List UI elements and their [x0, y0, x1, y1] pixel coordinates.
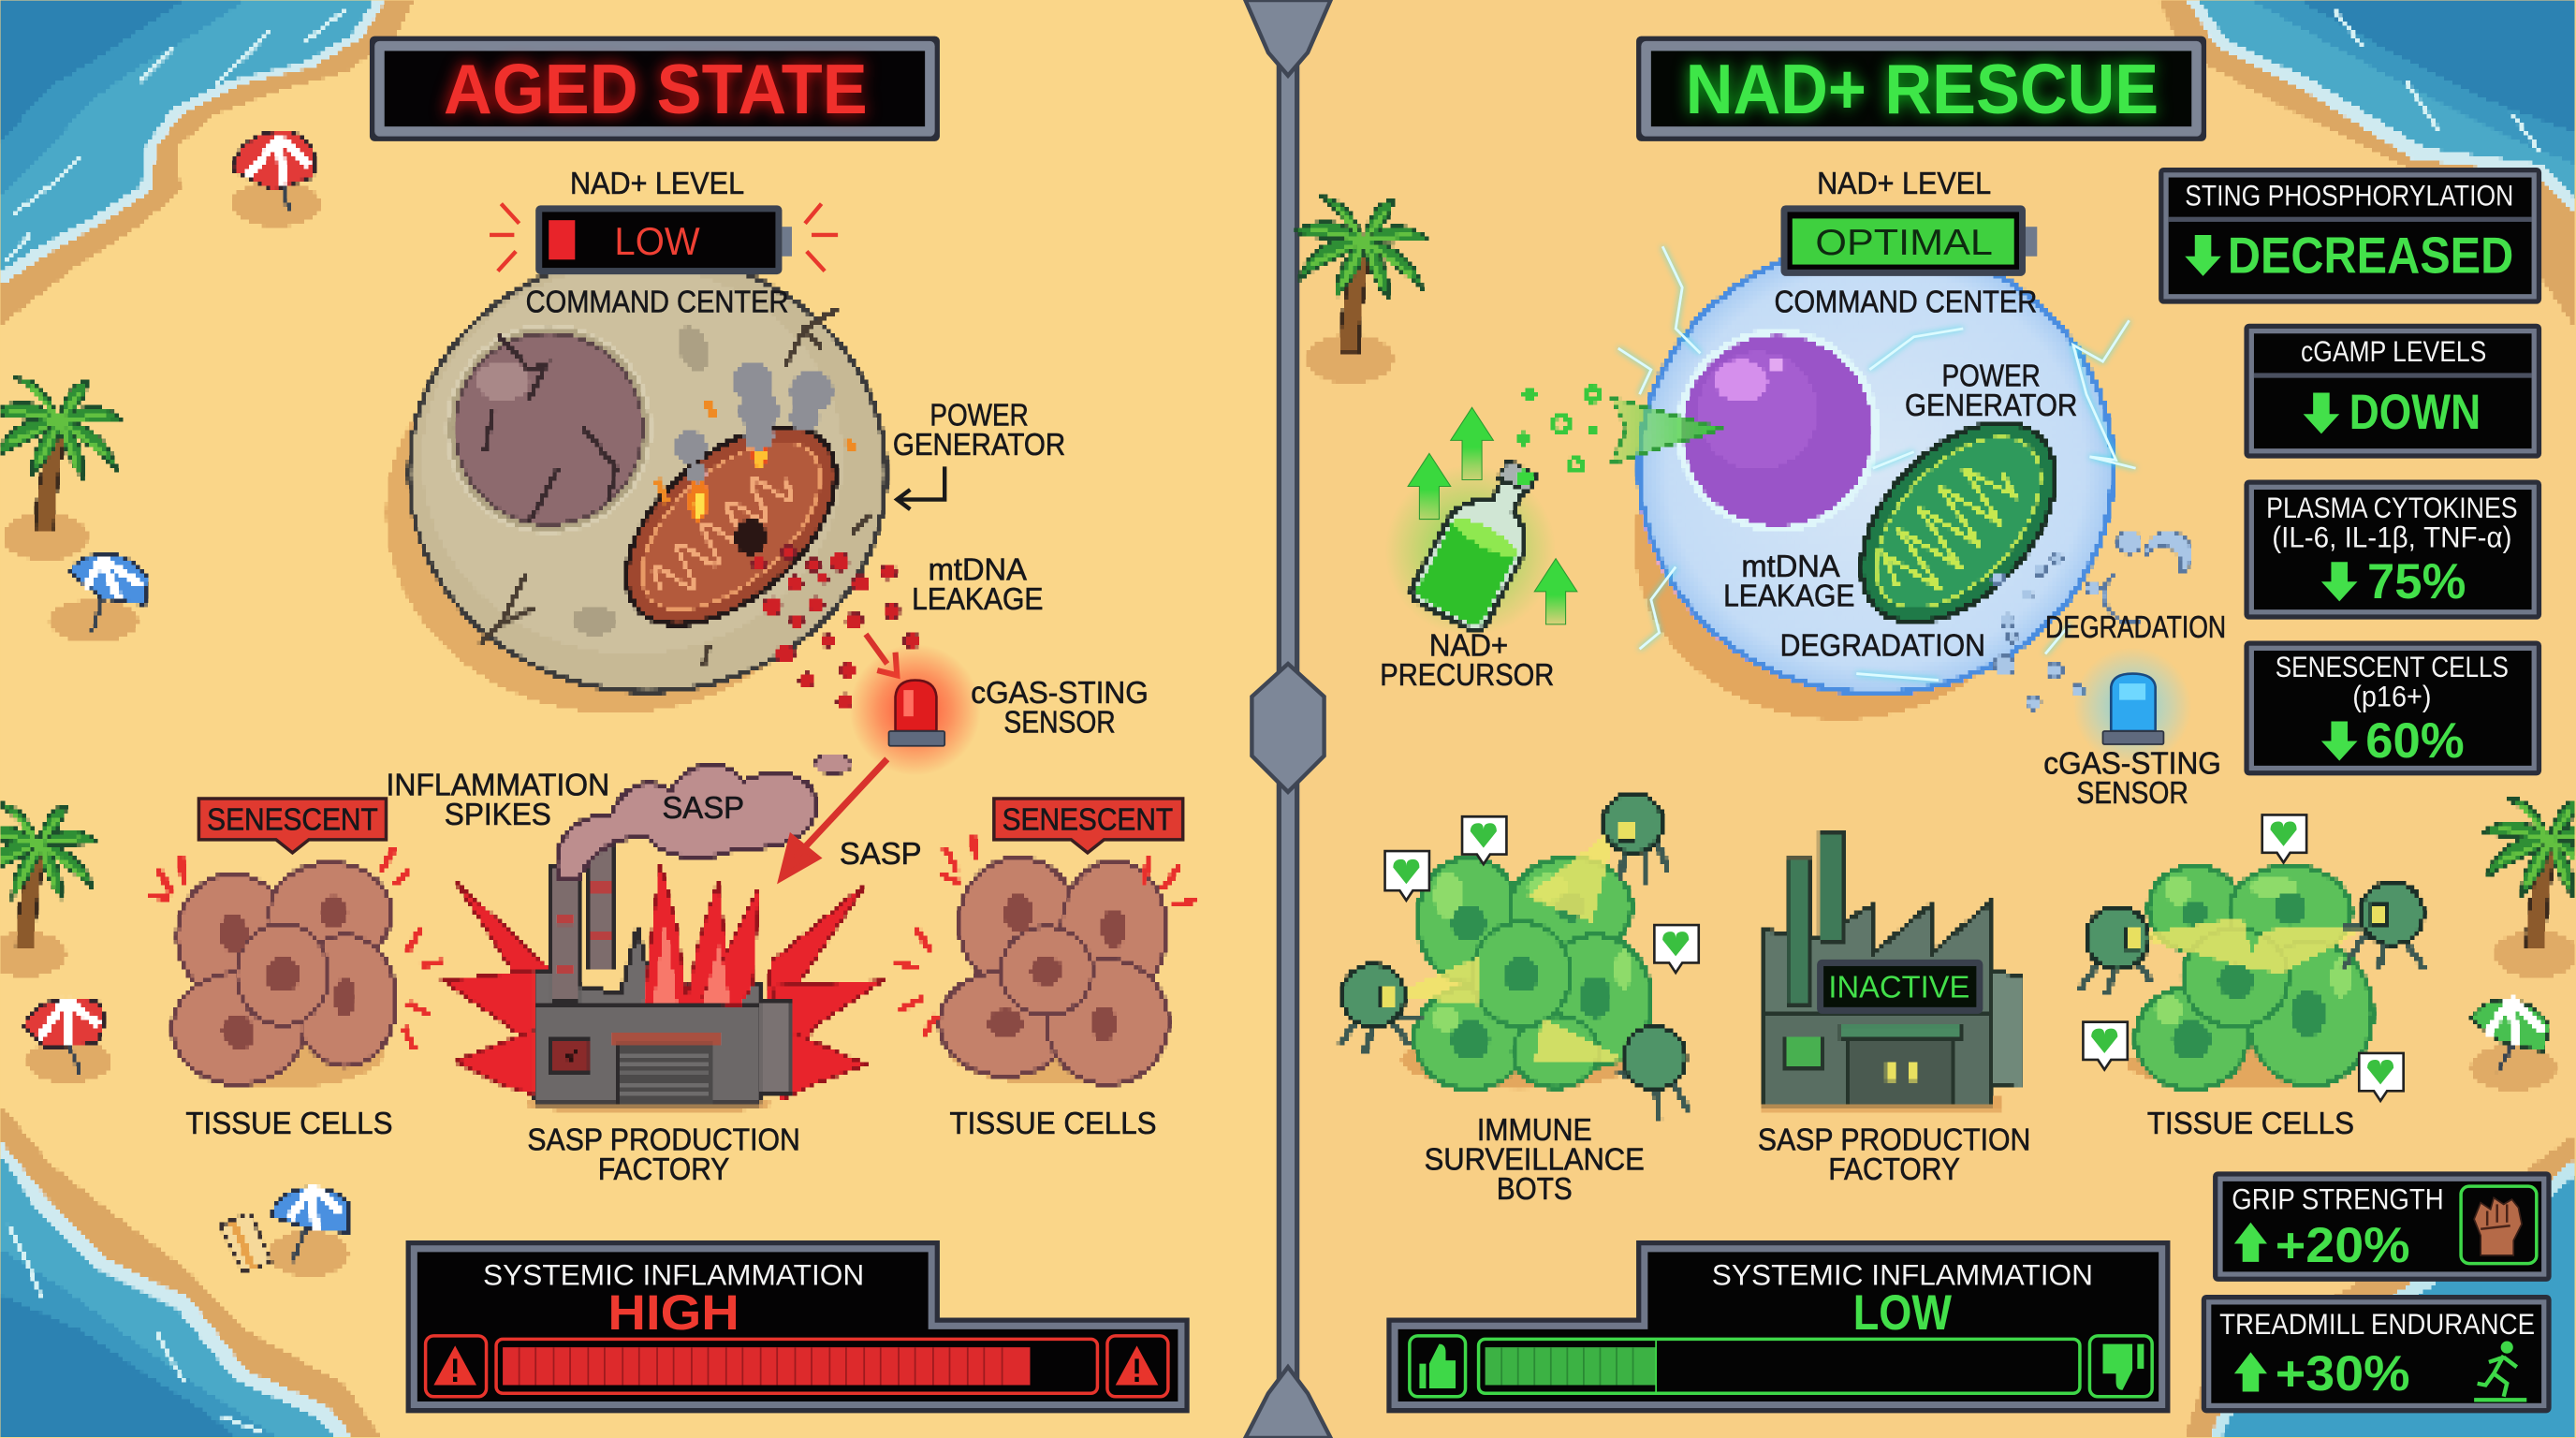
arrow: leakage to sensor: [866, 634, 897, 675]
up arrows: [1451, 407, 1493, 479]
label: immune surveillance bots: IMMUNE: [1477, 1113, 1592, 1148]
stat: cgamp levels: DOWN: [2349, 385, 2481, 440]
inflammation bar high: [496, 1339, 1097, 1393]
garage door: [611, 1032, 720, 1045]
label: cgas-sting sensor aged: SENSOR: [1003, 706, 1116, 741]
aged cell: [386, 255, 886, 713]
stat: treadmill endurance: [2202, 1295, 2552, 1413]
umbrella: blue left: [50, 554, 148, 642]
battery: low: LOW: [614, 219, 700, 263]
scanner beams: [1390, 827, 1625, 1064]
aged power generator: [591, 361, 871, 662]
label: sasp production factory right: SASP PRODUCTION: [1758, 1123, 2030, 1158]
label: immune surveillance bots: SURVEILLANCE: [1425, 1143, 1645, 1178]
stat: grip strength: GRIP STRENGTH: [2232, 1182, 2444, 1216]
label: sasp cloud: SASP: [662, 791, 744, 826]
palm tree: left lower: [0, 803, 98, 977]
palm tree: right lower: [2483, 798, 2576, 977]
label: tissue cells green: TISSUE CELLS: [2147, 1107, 2354, 1141]
immune bot top: [1603, 794, 1669, 884]
label: cgas-sting sensor aged: cGAS-STING: [971, 676, 1149, 711]
doors: [1840, 1025, 1962, 1038]
explosion spikes: [444, 881, 883, 1101]
label: power generator rescue: [1905, 359, 2077, 423]
label: mtdna leakage rescue: [1723, 550, 1854, 614]
label: mtdna leakage aged: mtDNA: [929, 553, 1028, 588]
label: inflammation spikes: SPIKES: [445, 798, 551, 832]
rescued nucleus: [1676, 329, 1880, 533]
label: cgas-sting sensor aged: [971, 676, 1149, 741]
icon: thumbs down: [2089, 1336, 2152, 1397]
systemic inflammation panel: high: SYSTEMIC INFLAMMATION: [483, 1257, 864, 1291]
label: power generator rescue: GENERATOR: [1905, 389, 2077, 423]
label: immune surveillance bots: BOTS: [1497, 1172, 1573, 1207]
warning sparks: [490, 204, 838, 271]
senescent factory: [444, 842, 883, 1114]
label: power generator aged: POWER: [929, 399, 1029, 433]
label: mtdna leakage rescue: mtDNA: [1741, 550, 1840, 584]
window: [550, 1038, 590, 1071]
icon: blue siren sensor: [2073, 647, 2191, 766]
arrow: precursor to nucleus: [1519, 388, 1721, 472]
icon: red siren sensor: [849, 644, 981, 775]
senescent tissue cells right: [896, 835, 1196, 1084]
label: degradation inside cell: DEGRADATION: [1780, 628, 1985, 663]
arrow: sensor to factory: [782, 759, 887, 877]
healthy tissue with bots left: [1340, 794, 1689, 1121]
smokestacks: [552, 868, 578, 1003]
stat: senescent cells: [2244, 640, 2541, 775]
icon: heart bubbles right: [2083, 814, 2404, 1101]
label: cgas-sting sensor rescue: SENSOR: [2076, 776, 2188, 811]
icon: nad+ precursor bottle: [1385, 407, 1577, 636]
title panel: aged state: [370, 37, 940, 141]
tag: senescent left: SENESCENT: [207, 802, 378, 837]
energy lightning: [1618, 246, 2136, 681]
stat: plasma cytokines: [2244, 479, 2541, 620]
nad+ level: aged: NAD+ LEVEL: [570, 167, 744, 201]
label: command center rescue: COMMAND CENTER: [1774, 285, 2037, 319]
label: sasp arrow: SASP: [840, 837, 922, 872]
stat: sting phosphorylation: [2159, 168, 2541, 304]
systemic inflammation panel: high: [406, 1240, 1190, 1413]
palm tree: right upper: [1295, 197, 1428, 384]
senescent tissue cells left: [148, 848, 444, 1088]
icon: heart bubbles left: [1385, 816, 1699, 973]
tag: senescent right: [994, 799, 1183, 853]
nad+ level: rescue: [1781, 167, 2037, 276]
label: cgas-sting sensor rescue: [2043, 747, 2221, 811]
healthy tissue with bots right: [2080, 866, 2424, 1090]
rescued cell: [1634, 243, 2113, 720]
label: nad+ precursor: NAD+: [1429, 628, 1508, 663]
immune bot left: [2080, 907, 2152, 996]
mtdna leakage dots: [753, 546, 919, 709]
healthy power generator: [1824, 387, 2092, 658]
scanner beams: [2130, 917, 2376, 973]
sign: inactive: INACTIVE: [1828, 970, 1969, 1005]
smoke plumes: [674, 361, 833, 483]
label: power generator aged: GENERATOR: [893, 428, 1065, 462]
sparks: [148, 848, 444, 1049]
nad+ level: aged: [490, 167, 838, 274]
ocean: top right: [2159, 0, 2576, 329]
sasp smoke cloud: [557, 755, 851, 879]
stat: plasma cytokines: 75%: [2367, 554, 2466, 609]
palm tree: left upper: [0, 378, 122, 561]
stat: cgamp levels: [2244, 324, 2541, 459]
degraded mtdna debris: [1992, 531, 2191, 710]
factory body: [535, 929, 759, 1104]
stat: sting phosphorylation: STING PHOSPHORYLATION: [2185, 178, 2513, 212]
label: degradation outside cell: DEGRADATION: [2045, 610, 2226, 645]
immune bot left: [1340, 964, 1423, 1055]
central divider: [1245, 0, 1331, 1438]
window: [1784, 1036, 1822, 1070]
stat: treadmill endurance: TREADMILL ENDURANCE: [2219, 1307, 2535, 1341]
label: power generator rescue: POWER: [1942, 359, 2041, 393]
icon: warning left: [426, 1336, 487, 1397]
immune bot bottom: [1617, 1027, 1689, 1121]
label: sasp production factory right: [1758, 1123, 2030, 1187]
title panel: nad+ rescue: [1636, 37, 2206, 141]
stat: plasma cytokines: (IL-6, IL-1β, TNF-α): [2272, 520, 2511, 553]
label: mtdna leakage aged: [912, 553, 1044, 617]
label: tissue cells left: TISSUE CELLS: [185, 1107, 393, 1141]
stat: grip strength: [2213, 1171, 2552, 1282]
battery: optimal: [1781, 205, 2037, 276]
label: mtdna leakage rescue: LEAKAGE: [1723, 580, 1854, 614]
label: sasp production factory left: FACTORY: [598, 1152, 729, 1187]
arrow: elbow to generator: [897, 466, 944, 509]
label: nad+ precursor: [1380, 628, 1554, 693]
label: sasp production factory left: [527, 1123, 800, 1187]
systemic inflammation panel: low: [1386, 1240, 2170, 1413]
label: inflammation spikes: INFLAMMATION: [386, 768, 609, 802]
systemic inflammation panel: low: SYSTEMIC INFLAMMATION: [1712, 1257, 2093, 1291]
stat: senescent cells: (p16+): [2352, 680, 2431, 713]
icon: warning right: [1107, 1336, 1168, 1397]
battery: optimal: OPTIMAL: [1815, 223, 1993, 263]
stat: treadmill endurance: +30%: [2276, 1346, 2410, 1401]
ocean: bottom left: [0, 1104, 381, 1438]
battery: low: [535, 205, 792, 274]
shell cracks: [480, 309, 871, 666]
immune bot right: [2343, 882, 2424, 969]
background: sand: [0, 0, 1288, 1438]
inflammation bar low: [1479, 1339, 2080, 1393]
label: power generator aged: [893, 399, 1065, 462]
stat: senescent cells: 60%: [2365, 713, 2465, 769]
value: low: LOW: [1853, 1285, 1952, 1341]
smokestacks: [1788, 859, 1808, 1004]
umbrella: red lower left: [24, 999, 111, 1083]
title text: nad+ rescue: NAD+ RESCUE: [1686, 50, 2159, 128]
label: command center aged: COMMAND CENTER: [526, 285, 788, 319]
flames: [644, 862, 759, 1005]
stat: sting phosphorylation: DECREASED: [2228, 227, 2513, 284]
umbrella: green right: [2471, 999, 2556, 1091]
aged nucleus: [446, 325, 651, 533]
inactive factory: [1761, 831, 2022, 1110]
sign: inactive: [1817, 960, 1983, 1014]
umbrella: red top left: [232, 131, 320, 227]
stat: senescent cells: SENESCENT CELLS: [2276, 650, 2509, 683]
umbrella and towel: blue beach spot: [220, 1186, 348, 1277]
ocean: top left: [0, 0, 414, 325]
stat: cgamp levels: cGAMP LEVELS: [2301, 334, 2486, 368]
icon: thumbs up: [1410, 1336, 1466, 1397]
label: mtdna leakage aged: LEAKAGE: [912, 582, 1044, 617]
label: sasp production factory right: FACTORY: [1828, 1152, 1960, 1187]
label: tissue cells right: TISSUE CELLS: [949, 1107, 1157, 1141]
value: high: HIGH: [607, 1285, 739, 1341]
icon: fist: [2461, 1186, 2537, 1264]
label: nad+ precursor: PRECURSOR: [1380, 658, 1554, 693]
tag: senescent right: SENESCENT: [1003, 802, 1173, 837]
tag: senescent left: [198, 799, 386, 853]
icon: runner: [2474, 1343, 2526, 1400]
title text: aged state: AGED STATE: [444, 50, 868, 128]
sparks: [896, 835, 1196, 1035]
nad+ level: rescue: NAD+ LEVEL: [1817, 167, 1991, 201]
label: sasp production factory left: SASP PRODUCTION: [527, 1123, 800, 1158]
label: immune surveillance bots: [1425, 1113, 1645, 1207]
stat: grip strength: +20%: [2276, 1218, 2410, 1273]
label: inflammation spikes: [386, 768, 609, 832]
stat: plasma cytokines: PLASMA CYTOKINES: [2266, 491, 2518, 524]
ocean: bottom right: [2185, 1134, 2576, 1438]
label: cgas-sting sensor rescue: cGAS-STING: [2043, 747, 2221, 782]
